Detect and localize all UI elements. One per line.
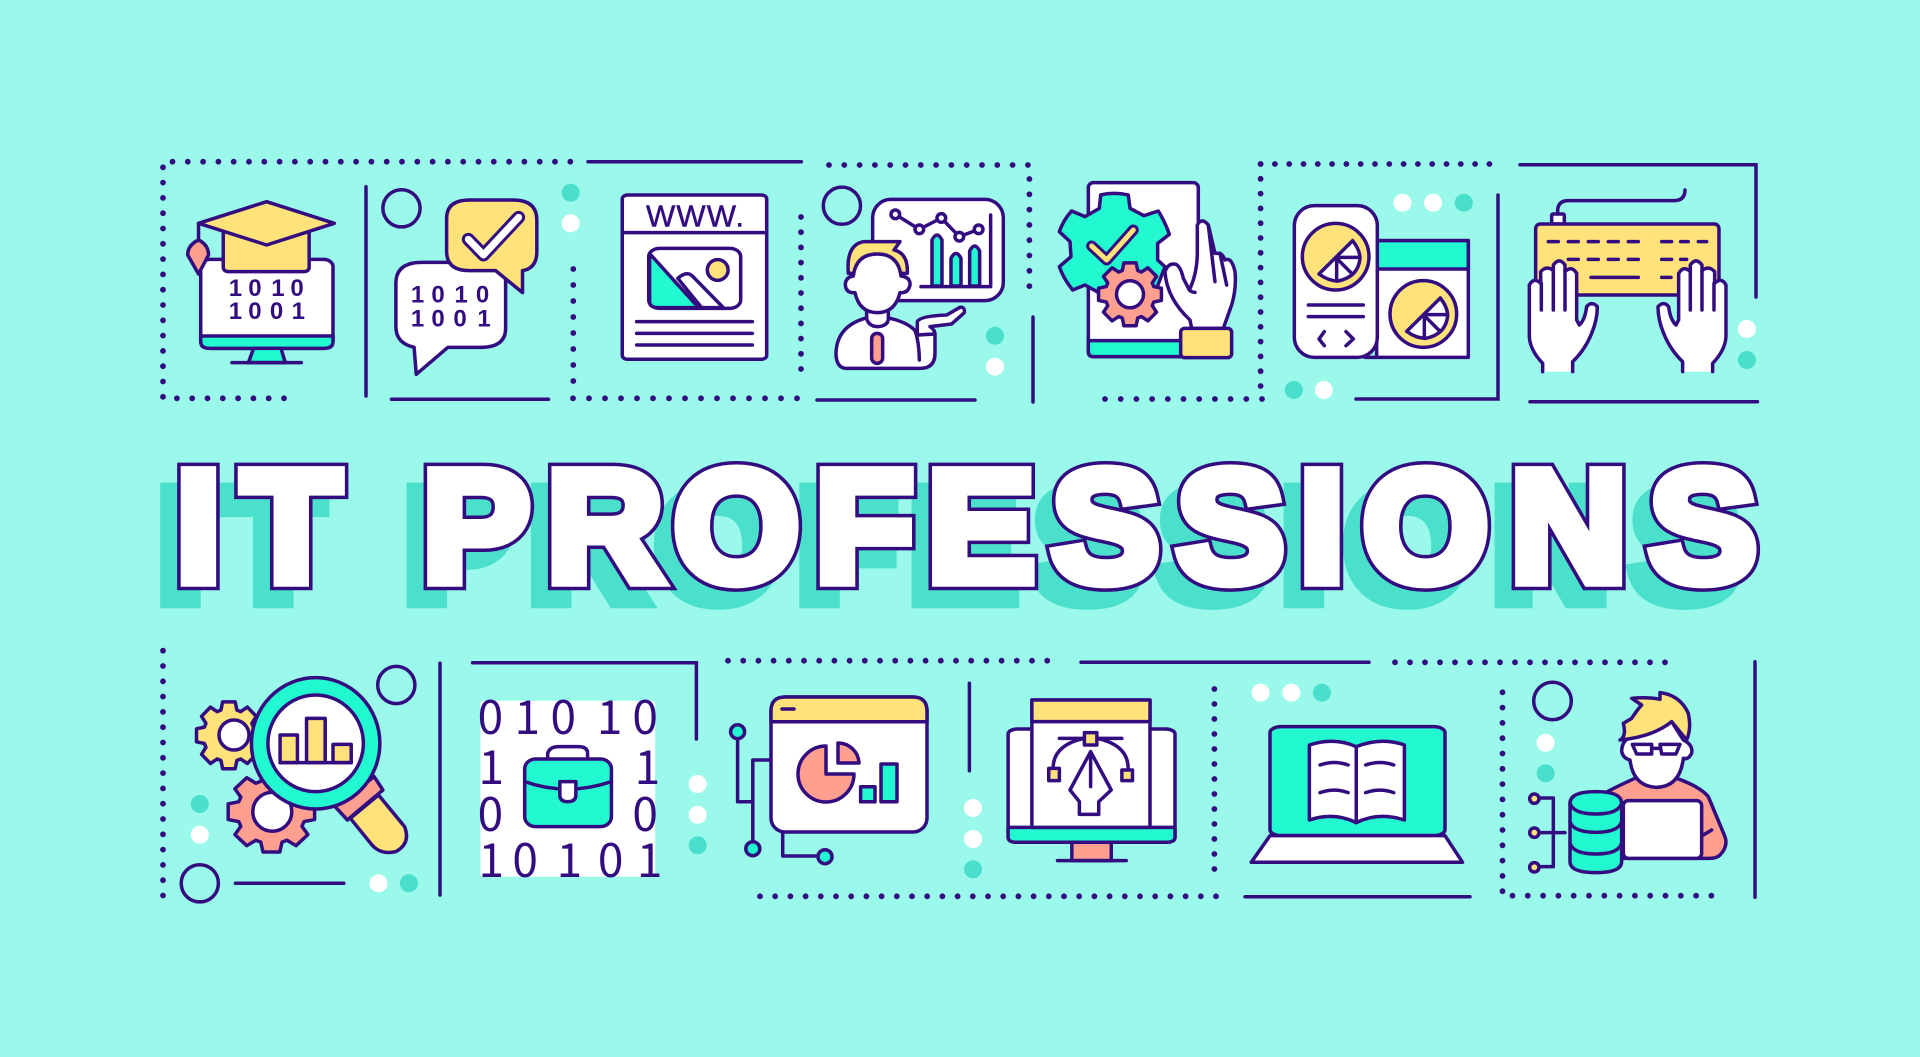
icon: speech bubbles with binary and check	[396, 200, 537, 374]
icon: analyst presenting chart	[836, 199, 1003, 368]
title: IT PROFESSIONS: IT PROFESSIONS	[158, 457, 1739, 633]
icon: briefcase in binary grid: 01010	[478, 682, 658, 748]
icon: briefcase in binary grid: 11	[479, 732, 660, 798]
title: IT PROFESSIONS: IT PROFESSIONS	[176, 438, 1757, 614]
icon: graduation cap on monitor: 1001	[229, 298, 305, 325]
icon: graduation cap on monitor: 1010	[229, 275, 304, 302]
icon: speech bubbles with binary and check: 1010	[411, 282, 489, 309]
icon: monitor with vector pen tool	[1008, 700, 1175, 861]
icon: hands on keyboard	[1529, 190, 1726, 372]
icon: dashboard window with pie chart and circuit	[731, 697, 927, 864]
decorative frame lines and dots	[163, 162, 1758, 902]
icon: web page with image: WWW.	[646, 199, 744, 234]
icon: laptop with open book	[1251, 727, 1462, 862]
icon: briefcase in binary grid	[478, 682, 662, 891]
icon: speech bubbles with binary and check: 1001	[411, 306, 491, 333]
icon: phone and window with lemon charts	[1294, 206, 1468, 357]
icon: briefcase in binary grid: 10101	[479, 825, 662, 891]
icon: web page with image	[622, 195, 767, 359]
icon: tablet with gears and hand	[1059, 183, 1235, 358]
title: IT PROFESSIONS: IT PROFESSIONS	[176, 438, 1757, 614]
icon: briefcase in binary grid: 00	[478, 779, 658, 845]
icon: developer with database	[1530, 693, 1726, 873]
icon: magnifier with gears and bar chart	[196, 678, 407, 852]
icon: graduation cap on monitor	[188, 202, 334, 363]
